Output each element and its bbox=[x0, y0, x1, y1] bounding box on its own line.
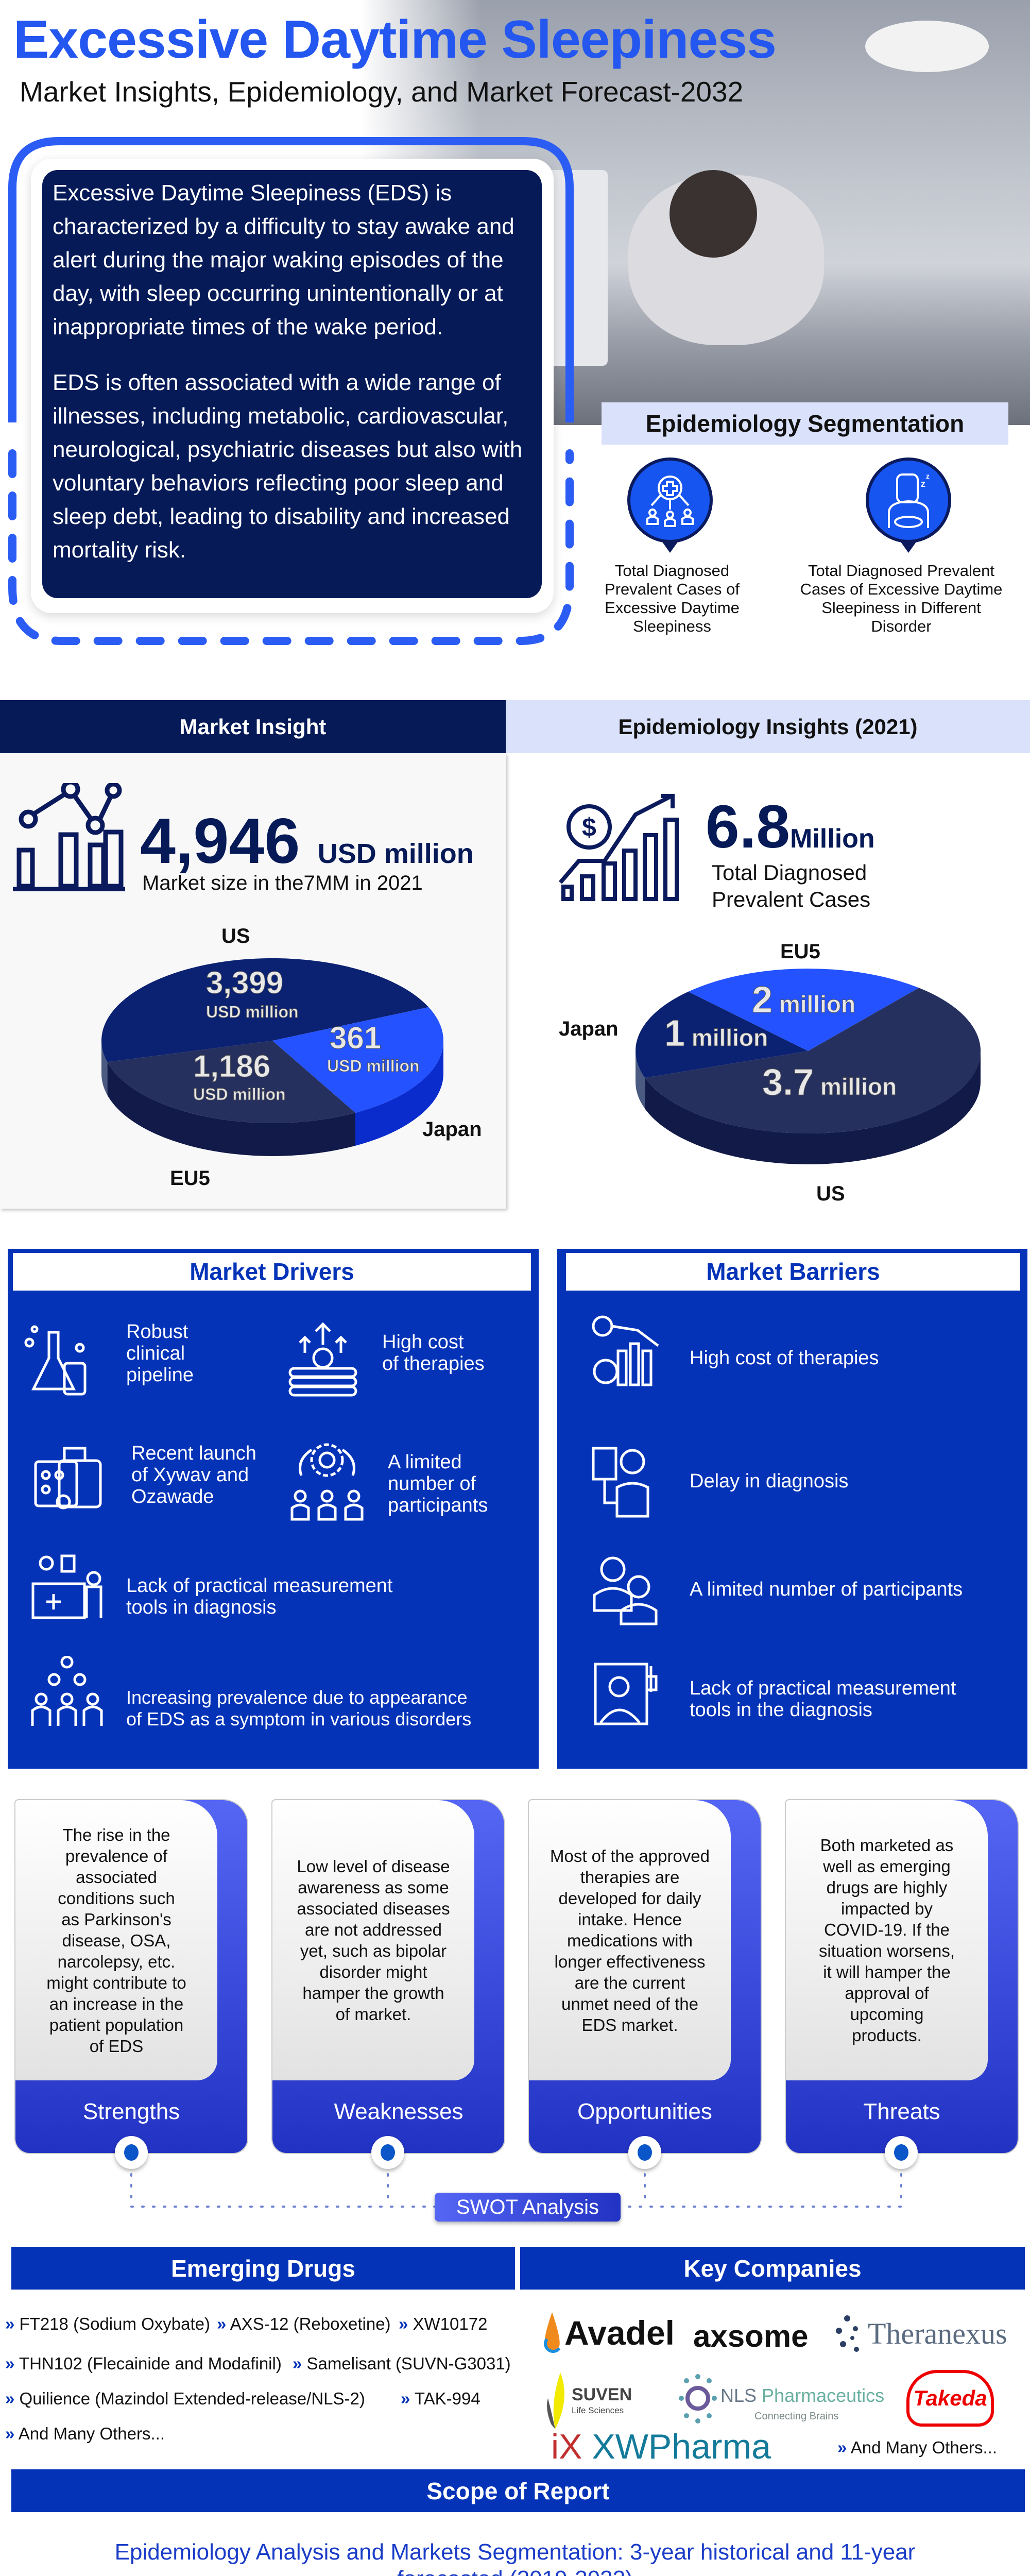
heading: Market Drivers bbox=[13, 1253, 531, 1291]
text: driver 6: of EDS as a symptom in various disorders bbox=[126, 1708, 471, 1730]
heading: Scope of Report bbox=[11, 2469, 1025, 2512]
icon: coins bbox=[288, 1322, 357, 1396]
chart: market pie: USD million bbox=[193, 1085, 286, 1104]
heading: Market Barriers bbox=[566, 1253, 1020, 1291]
text: Prevalent Cases bbox=[712, 887, 870, 911]
panel: SWOT threats bbox=[785, 1799, 1019, 2154]
icon: participants bbox=[593, 1557, 657, 1625]
panel: SWOT strengths: of EDS bbox=[90, 2036, 143, 2056]
panel: SWOT threats: well as emerging bbox=[823, 1857, 951, 1876]
icon: cost bbox=[592, 1316, 659, 1386]
list: emerging drugs: » THN102 (Flecainide and Modafinil) bbox=[5, 2354, 282, 2373]
chart: epidemiology pie: 3.7 million bbox=[762, 1062, 897, 1103]
text: driver 1: Robust bbox=[126, 1321, 188, 1343]
list: emerging drugs: » XW10172 bbox=[399, 2314, 487, 2333]
chart: epidemiology pie: 2 million bbox=[752, 979, 855, 1021]
icon: growth chart with dollar: $ bbox=[582, 813, 596, 842]
panel: SWOT weaknesses: of market. bbox=[336, 2005, 411, 2024]
text: driver 5: Lack of practical measurement bbox=[126, 1575, 392, 1597]
icon: growth chart with dollar bbox=[559, 794, 679, 901]
text block: definition: alert during the major waking episodes of the bbox=[53, 247, 504, 273]
panel: SWOT threats: approval of bbox=[845, 1984, 929, 2003]
icon: sleeping person: z bbox=[921, 479, 925, 489]
logo: Avadel bbox=[542, 2308, 671, 2360]
panel: SWOT strengths: an increase in the bbox=[49, 1994, 183, 2013]
subtitle: Market Insights, Epidemiology, and Market Forecast-2032 bbox=[20, 76, 743, 108]
panel: SWOT threats: products. bbox=[852, 2026, 922, 2045]
icon: medicine bbox=[34, 1447, 102, 1510]
list: emerging drugs: » FT218 (Sodium Oxybate) bbox=[5, 2314, 210, 2333]
heading: Market Insight bbox=[0, 700, 506, 753]
panel: SWOT threats: Threats bbox=[863, 2099, 940, 2124]
text: Total Diagnosed bbox=[712, 860, 867, 885]
chart: market pie: USD million bbox=[327, 1057, 420, 1075]
panel: SWOT opportunities: developed for daily bbox=[558, 1889, 701, 1907]
heading: Scope of Report: Scope of Report bbox=[426, 2477, 610, 2504]
panel: SWOT opportunities: therapies are bbox=[580, 1867, 679, 1887]
text block: definition bbox=[42, 170, 542, 598]
logo: NLS Pharmaceutics bbox=[677, 2367, 863, 2434]
icon: sleeping person: z bbox=[926, 472, 930, 480]
icon: measurement tools bbox=[32, 1555, 102, 1619]
text: segmentation label 2 bbox=[800, 562, 1002, 635]
list: emerging drugs: » Samelisant (SUVN-G3031) bbox=[293, 2354, 511, 2373]
chart: market pie: 1,186 bbox=[193, 1049, 270, 1083]
list: emerging drugs bbox=[0, 2308, 515, 2447]
panel: market drivers bbox=[8, 1249, 539, 1769]
logo: Theranexus: Theranexus bbox=[868, 2317, 1007, 2350]
text: driver 5: tools in diagnosis bbox=[126, 1597, 277, 1618]
text: driver 4: number of bbox=[388, 1473, 476, 1495]
chart: epidemiology pie: EU5 bbox=[780, 940, 820, 963]
panel: SWOT opportunities: longer effectiveness bbox=[555, 1952, 705, 1971]
text block: definition: characterized by a difficulty to stay awake and bbox=[53, 214, 514, 239]
text: driver 1: pipeline bbox=[126, 1364, 194, 1386]
panel: SWOT opportunities: medications with bbox=[567, 1931, 693, 1950]
panel: SWOT weaknesses: are not addressed bbox=[305, 1920, 442, 1939]
panel: SWOT strengths: conditions such bbox=[58, 1889, 175, 1907]
panel: SWOT weaknesses: yet, such as bipolar bbox=[300, 1941, 447, 1960]
panel: SWOT strengths: disease, OSA, bbox=[62, 1931, 170, 1950]
logo: Takeda bbox=[906, 2370, 994, 2427]
text: segmentation label 2: Cases of Excessive Daytime bbox=[800, 580, 1002, 598]
logo: NLS Pharmaceutics: Connecting Brains bbox=[754, 2411, 838, 2422]
panel: SWOT opportunities: Most of the approved bbox=[550, 1846, 710, 1865]
icon: diagnosed cases bbox=[627, 457, 713, 553]
SWOT dots bbox=[115, 2136, 148, 2169]
panel: SWOT threats: drugs are highly bbox=[827, 1878, 947, 1897]
heading: Emerging Drugs bbox=[11, 2247, 515, 2290]
icon: sleeping person bbox=[866, 457, 951, 553]
panel: SWOT weaknesses bbox=[271, 1799, 505, 2154]
text: driver 3: Recent launch bbox=[131, 1443, 256, 1464]
text: driver 2: High cost bbox=[382, 1331, 464, 1353]
panel: SWOT strengths: might contribute to bbox=[46, 1973, 186, 1992]
heading: Market Insight: Market Insight bbox=[180, 715, 326, 739]
panel: SWOT threats: upcoming bbox=[850, 2005, 924, 2024]
text: driver 2: of therapies bbox=[382, 1353, 485, 1375]
text block: definition: mortality risk. bbox=[53, 537, 186, 563]
text: driver 6 bbox=[126, 1687, 471, 1730]
icon: chart bbox=[13, 783, 125, 891]
chart: market pie: 3,399 bbox=[206, 965, 283, 1000]
text: segmentation label 1: Total Diagnosed Prevalent Cases of Excessive Daytime Sleepiness bbox=[605, 562, 740, 635]
text: driver 1: clinical bbox=[126, 1343, 185, 1364]
chart: epidemiology pie bbox=[559, 940, 981, 1205]
panel: SWOT opportunities: EDS market. bbox=[581, 2015, 678, 2034]
panel: SWOT weaknesses: associated diseases bbox=[297, 1899, 450, 1918]
panel: SWOT opportunities bbox=[528, 1799, 762, 2154]
panel: SWOT strengths: The rise in the bbox=[62, 1825, 170, 1844]
logo: Suven: SUVEN bbox=[572, 2385, 632, 2404]
heading: Market Barriers: Market Barriers bbox=[706, 1258, 880, 1285]
panel: SWOT strengths: prevalence of bbox=[65, 1846, 167, 1865]
chart: epidemiology pie: US bbox=[816, 1182, 845, 1205]
text: driver 6: Increasing prevalence due to appearance bbox=[126, 1687, 467, 1708]
list: emerging drugs: » And Many Others... bbox=[5, 2424, 165, 2443]
panel: SWOT strengths: Strengths bbox=[83, 2099, 180, 2124]
text: driver 1 bbox=[126, 1321, 194, 1386]
text: driver 3: of Xywav and bbox=[131, 1464, 249, 1486]
panel: SWOT threats: impacted by bbox=[841, 1899, 933, 1918]
text: segmentation label 2: Total Diagnosed Prevalent bbox=[808, 562, 994, 580]
text: barrier 4: tools in the diagnosis bbox=[690, 1699, 872, 1721]
text block: definition: inappropriate times of the wake period. bbox=[53, 314, 443, 340]
text: segmentation label 2: Disorder bbox=[871, 617, 932, 635]
text: barrier 1: High cost of therapies bbox=[690, 1347, 879, 1369]
heading: Market Drivers: Market Drivers bbox=[190, 1258, 354, 1285]
panel: SWOT strengths: associated bbox=[76, 1867, 157, 1887]
panel: SWOT weaknesses: Weaknesses bbox=[334, 2099, 464, 2124]
icon: gear people bbox=[290, 1444, 364, 1521]
text block: definition: sleep debt, leading to disability and increased bbox=[53, 504, 510, 529]
logo: Avadel: Avadel bbox=[564, 2314, 675, 2352]
list: emerging drugs: » Quilience (Mazindol Extended-release/NLS-2) bbox=[5, 2389, 365, 2408]
text block: definition: day, with sleep occurring unintentionally or at bbox=[53, 281, 503, 306]
number: 4,946: 4,946 USD million bbox=[140, 806, 474, 877]
text: driver 4: A limited bbox=[388, 1451, 462, 1473]
panel: SWOT weaknesses: disorder might bbox=[319, 1962, 427, 1981]
text: barrier 2: Delay in diagnosis bbox=[690, 1470, 848, 1492]
title: Excessive Daytime Sleepiness bbox=[13, 10, 776, 70]
text block: definition: neurological, psychiatric diseases but also with bbox=[53, 437, 522, 462]
background photo: sleeping woman at desk bbox=[360, 0, 1030, 425]
panel: SWOT opportunities: are the current bbox=[575, 1973, 685, 1992]
text block: definition: EDS is often associated with a wide range of bbox=[53, 370, 501, 395]
panel: market barriers bbox=[557, 1249, 1027, 1769]
icon: delay bbox=[592, 1447, 649, 1518]
chart: epidemiology pie: Japan bbox=[559, 1018, 619, 1040]
panel: SWOT opportunities: intake. Hence bbox=[578, 1909, 682, 1929]
panel: SWOT threats: it will hamper the bbox=[823, 1962, 951, 1981]
list: emerging drugs: » TAK-994 bbox=[401, 2389, 480, 2408]
panel: SWOT opportunities: unmet need of the bbox=[561, 1994, 698, 2013]
chart: market pie: Japan bbox=[422, 1118, 482, 1141]
panel: SWOT strengths: as Parkinson's bbox=[61, 1909, 171, 1929]
logos: key companies bbox=[536, 2298, 1025, 2463]
heading: Epidemiology Insights bbox=[506, 700, 1030, 753]
chart: market pie: 361 bbox=[330, 1021, 381, 1055]
logo: XWPharma: iX XWPharma bbox=[551, 2427, 771, 2466]
panel: SWOT strengths bbox=[14, 1799, 248, 2154]
text block: definition: illnesses, including metabolic, cardiovascular, bbox=[53, 403, 508, 429]
heading: Epidemiology Segmentation: Epidemiology Segmentation bbox=[646, 410, 964, 437]
number: 6.8 Million: 6.8Million bbox=[706, 793, 875, 861]
heading: Key Companies: Key Companies bbox=[683, 2255, 862, 2281]
text: driver 4: participants bbox=[388, 1495, 488, 1516]
text: barrier 4 bbox=[690, 1677, 956, 1721]
heading: Key Companies bbox=[520, 2247, 1025, 2290]
text block: definition: voluntary behaviors reflecting poor sleep and bbox=[53, 470, 504, 496]
logo: NLS Pharmaceutics: NLS Pharmaceutics bbox=[720, 2385, 884, 2406]
logo: axsome: axsome bbox=[693, 2319, 808, 2353]
panel: SWOT weaknesses: awareness as some bbox=[298, 1878, 449, 1897]
text: driver 3 bbox=[131, 1443, 256, 1507]
chart: market pie bbox=[101, 927, 482, 1190]
text block: definition: Excessive Daytime Sleepiness (EDS) is bbox=[53, 180, 452, 206]
text: driver 2 bbox=[382, 1331, 485, 1375]
heading: Epidemiology Segmentation bbox=[602, 402, 1008, 445]
logo: Takeda: Takeda bbox=[913, 2386, 987, 2410]
chart: market pie: EU5 bbox=[170, 1167, 210, 1190]
text: driver 5 bbox=[126, 1575, 392, 1618]
panel: description bbox=[8, 137, 574, 645]
label: SWOT Analysis bbox=[435, 2193, 621, 2222]
text: and many others: » And Many Others... bbox=[837, 2438, 997, 2457]
chart: epidemiology pie: 1 million bbox=[664, 1013, 768, 1054]
list: emerging drugs: » AXS-12 (Reboxetine) bbox=[217, 2314, 391, 2333]
panel: market insight: Market size in the7MM in 2021 bbox=[142, 872, 423, 894]
text: barrier 4: Lack of practical measurement bbox=[690, 1677, 956, 1699]
text: driver 4 bbox=[388, 1451, 488, 1516]
panel: SWOT threats: COVID-19. If the bbox=[824, 1920, 950, 1939]
panel: SWOT strengths: narcolepsy, etc. bbox=[58, 1952, 175, 1971]
panel: SWOT strengths: patient population bbox=[49, 2015, 183, 2034]
text: barrier 3: A limited number of participants bbox=[690, 1579, 963, 1600]
logo: Theranexus bbox=[832, 2308, 1022, 2360]
text: driver 3: Ozawade bbox=[131, 1486, 214, 1507]
icon: patient monitor bbox=[594, 1663, 657, 1725]
logo: Suven: Life Sciences bbox=[572, 2405, 624, 2415]
panel: SWOT weaknesses: Low level of disease bbox=[297, 1857, 450, 1876]
icon: flask bbox=[25, 1325, 87, 1395]
text: scope subtitle: Epidemiology Analysis and Markets Segmentation: 3-year historical and 11-year bbox=[115, 2539, 915, 2565]
panel: SWOT threats: situation worsens, bbox=[819, 1941, 955, 1960]
heading: Emerging Drugs: Emerging Drugs bbox=[171, 2255, 355, 2281]
logo: Suven bbox=[545, 2367, 632, 2434]
panel: market insight bbox=[0, 753, 506, 1209]
panel: SWOT threats: Both marketed as bbox=[820, 1836, 953, 1855]
text: segmentation label 2: Sleepiness in Different bbox=[821, 599, 981, 617]
panel: SWOT weaknesses: hamper the growth bbox=[302, 1984, 444, 2003]
heading: Epidemiology Insights: Epidemiology Insights (2021) bbox=[618, 715, 918, 739]
icon: population bbox=[31, 1656, 103, 1726]
chart: market pie: USD million bbox=[206, 1003, 299, 1021]
label: SWOT Analysis: SWOT Analysis bbox=[456, 2196, 599, 2218]
text: scope subtitle bbox=[31, 2539, 999, 2576]
panel: SWOT opportunities: Opportunities bbox=[577, 2099, 712, 2124]
